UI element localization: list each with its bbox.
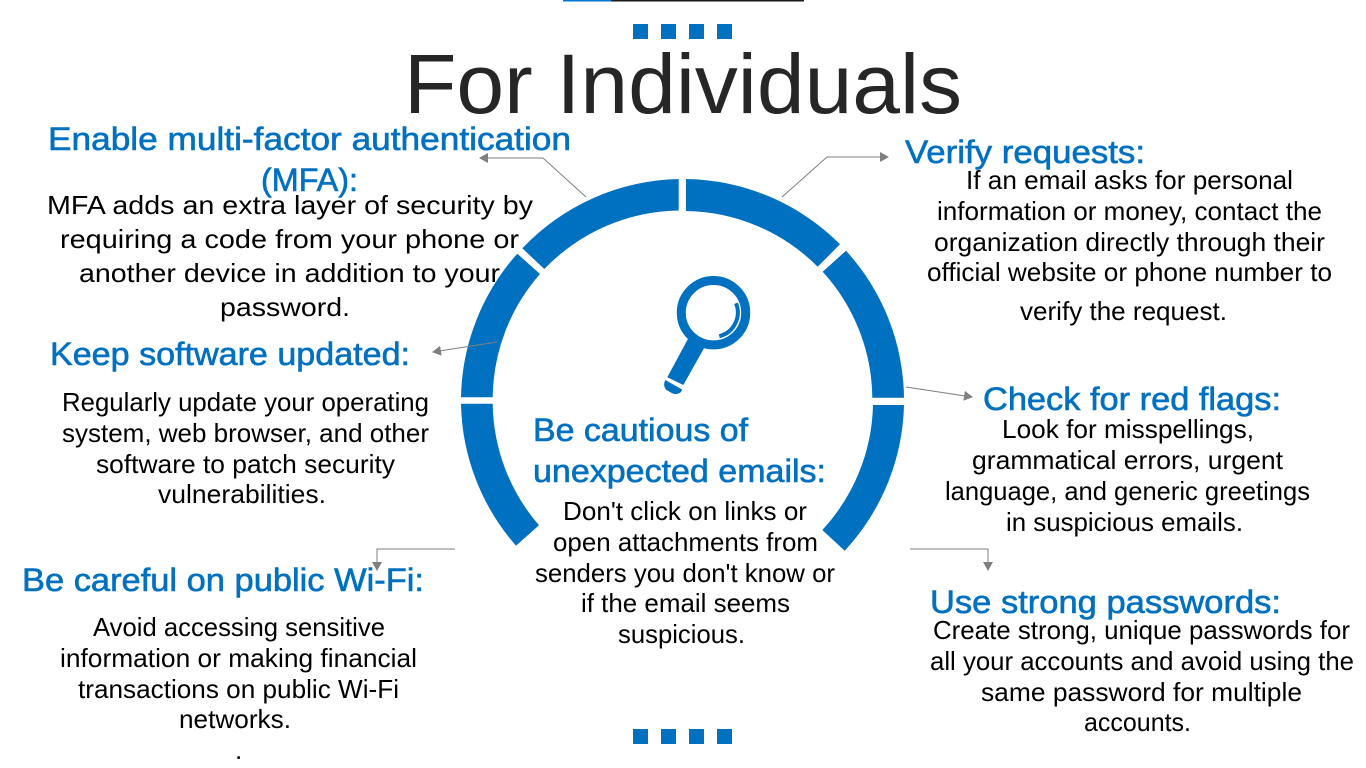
section: be careful on public wi-fi: Be careful on public Wi-Fi: <box>22 562 424 598</box>
section: keep software updated: Keep software updated: <box>50 336 410 372</box>
connector: to MFA heading <box>480 158 586 197</box>
bottom square decoration <box>633 729 732 744</box>
title: For Individuals <box>404 37 962 131</box>
section: enable multi-factor authentication: MFA adds an extra layer of security by <box>47 190 533 220</box>
section: use strong passwords: accounts. <box>1084 707 1191 737</box>
section: verify requests: information or money, contact the <box>937 196 1322 226</box>
icon: magnifying glass <box>664 280 746 394</box>
top square decoration <box>633 24 732 39</box>
segmented ring <box>461 179 904 551</box>
section: use strong passwords: all your accounts and avoid using the <box>930 646 1354 676</box>
section: be cautious of unexpected emails: if the email seems <box>581 588 790 618</box>
section: enable multi-factor authentication: requiring a code from your phone or <box>60 224 519 254</box>
section: verify requests: verify the request. <box>1020 296 1227 326</box>
section: use strong passwords <box>930 584 1354 737</box>
section: verify requests: official website or phone number to <box>927 257 1332 287</box>
section: be careful on public wi-fi: transactions on public Wi-Fi <box>78 674 399 704</box>
section: be cautious of unexpected emails: unexpected emails: <box>533 453 826 489</box>
section: be cautious of unexpected emails: Don't click on links or <box>563 496 807 526</box>
section: enable multi-factor authentication <box>47 121 571 322</box>
section: enable multi-factor authentication: Enable multi-factor authentication <box>48 121 571 157</box>
section: be cautious of unexpected emails: suspicious. <box>618 619 745 649</box>
section: be cautious of unexpected emails <box>533 412 835 649</box>
section: be cautious of unexpected emails: senders you don't know or <box>535 558 835 588</box>
section: enable multi-factor authentication: password. <box>220 292 350 322</box>
section: keep software updated <box>50 336 429 509</box>
connector: to verify requests <box>782 157 888 197</box>
section: be careful on public wi-fi: networks. <box>179 704 291 734</box>
section: enable multi-factor authentication: (MFA): <box>261 162 358 198</box>
section: be careful on public wi-fi <box>22 562 424 765</box>
section: verify requests: Verify requests: <box>905 134 1145 170</box>
connector: to public wi-fi <box>377 549 455 570</box>
section: verify requests: organization directly through their <box>934 227 1325 257</box>
section: use strong passwords: Create strong, unique passwords for <box>933 615 1350 645</box>
section: check for red flags: grammatical errors, urgent <box>972 445 1284 475</box>
section: keep software updated: system, web browser, and other <box>62 418 429 448</box>
section: check for red flags <box>945 381 1310 537</box>
section: check for red flags: Look for misspellings, <box>1002 414 1254 444</box>
section: be careful on public wi-fi: Avoid accessing sensitive <box>93 612 385 642</box>
section: verify requests: If an email asks for personal <box>966 165 1293 195</box>
section: use strong passwords: Use strong passwords: <box>930 584 1281 620</box>
section: keep software updated: software to patch security <box>96 449 395 479</box>
section: use strong passwords: same password for multiple <box>981 677 1302 707</box>
connector: to keep software updated <box>433 342 497 352</box>
section: be careful on public wi-fi: information or making financial <box>60 643 417 673</box>
section: verify requests <box>905 134 1332 326</box>
section: be cautious of unexpected emails: open attachments from <box>553 527 818 557</box>
section: be careful on public wi-fi: . <box>235 735 242 765</box>
connector: to strong passwords <box>910 549 988 570</box>
connector: to check for red flags <box>906 387 972 397</box>
section: check for red flags: in suspicious emails. <box>1006 507 1243 537</box>
top progress bar <box>563 0 804 2</box>
section: keep software updated: Regularly update your operating <box>62 387 429 417</box>
section: check for red flags: Check for red flags: <box>983 381 1281 417</box>
section: keep software updated: vulnerabilities. <box>158 479 326 509</box>
section: be cautious of unexpected emails: Be cautious of <box>533 412 748 448</box>
section: check for red flags: language, and generic greetings <box>945 476 1310 506</box>
section: enable multi-factor authentication: another device in addition to your <box>79 258 500 288</box>
